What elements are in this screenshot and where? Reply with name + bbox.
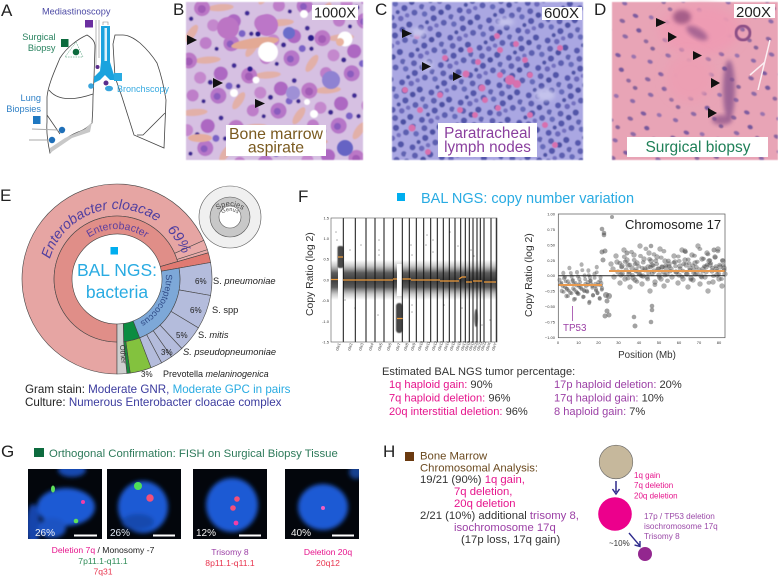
center marker — [110, 247, 118, 254]
lung shadow — [50, 122, 92, 153]
chromosome labels: chrY — [490, 342, 498, 351]
FISH caption: trisomy 8: 8p11.1-q11.1 — [205, 558, 255, 568]
gram stain line: Gram stain: Moderate GNR, Moderate GPC in pairs — [25, 383, 291, 396]
arrowheads — [402, 29, 462, 81]
main clone — [598, 497, 632, 531]
chromosome labels: chr12 — [430, 340, 439, 351]
chr1q gain block — [338, 246, 344, 300]
species labels: 3% — [141, 370, 153, 379]
panel A: lung diagram with biopsy sites — [6, 6, 170, 153]
chromosome labels: chr13 — [436, 340, 445, 351]
FISH caption: trisomy 8: Trisomy 8 — [211, 547, 249, 557]
arrowheads — [656, 18, 720, 118]
scattered points — [335, 231, 491, 326]
x axis title: Position (Mb) — [618, 350, 676, 361]
chromosome labels: chr11 — [423, 340, 432, 351]
species labels: S. spp — [212, 305, 238, 315]
site: lung biopsy lower — [49, 137, 55, 143]
y axis labels: 1.5 — [323, 216, 330, 220]
main clone changes: 7q deletion — [634, 481, 673, 490]
chromosome labels: chr17 — [459, 340, 468, 351]
label: bronchoscopy: Bronchscopy — [117, 84, 170, 94]
label: Enterobacter: Enterobacter — [86, 222, 149, 238]
x axis labels: 50 — [657, 340, 662, 345]
FISH caption: deletion 20q: 20q12 — [316, 558, 340, 568]
label: Streptococcus: Streptococcus — [140, 274, 172, 326]
chromosomal analysis text — [420, 450, 579, 546]
y axis labels: −0.75 — [545, 320, 556, 324]
y axis labels: 1.0 — [323, 236, 330, 241]
y axis labels: -1.0 — [322, 319, 330, 324]
FISH image 3: 12% — [196, 528, 216, 539]
chart: chromosome 17 copy ratio — [524, 212, 728, 361]
subclone frequency: ~10% — [609, 539, 630, 548]
heading: FISH: Orthogonal Confirmation: FISH on Surgical Biopsy Tissue — [49, 448, 338, 460]
chart: genome-wide copy ratio — [305, 216, 498, 351]
plot frame — [331, 218, 497, 342]
x axis labels: 20 — [596, 340, 601, 345]
label: 69 percent: 69% — [168, 226, 191, 252]
chromosome labels: chr8 — [402, 342, 410, 351]
chr20 deletion block — [474, 309, 478, 327]
y axis labels: 0.50 — [547, 242, 556, 248]
magnification box: 200X — [736, 4, 771, 21]
species labels: S. pseudopneumoniae — [183, 347, 276, 357]
chromosome labels: chr1 — [334, 342, 342, 351]
chromosome labels: chr5 — [376, 342, 384, 351]
legend rings: species and genus — [198, 186, 262, 248]
chromosome labels: chrX — [484, 342, 492, 351]
caption box: surgical biopsy — [627, 137, 768, 157]
panel label G: G — [1, 442, 14, 461]
marker: lung biopsies square — [33, 116, 40, 124]
needle lines — [29, 129, 58, 140]
chromosome separators — [343, 218, 496, 342]
clonal evolution diagram — [598, 445, 718, 561]
subclone changes: 17p / TP53 deletion — [644, 512, 715, 521]
panel D: surgical biopsy micrograph — [612, 2, 778, 160]
y axis labels: 1.00 — [547, 212, 556, 216]
chromosome labels: chr4 — [367, 342, 375, 351]
TP53 annotation — [563, 306, 587, 334]
tissue detail — [188, 10, 353, 156]
species labels: S. pneumoniae — [213, 276, 276, 286]
left column — [389, 379, 528, 418]
main clone changes: 20q deletion — [634, 492, 678, 500]
y axis labels: 0.00 — [547, 273, 556, 278]
culture line: Culture: Numerous Enterobacter cloacae complex — [25, 396, 282, 409]
x axis labels: 80 — [717, 340, 722, 345]
Prevotella outer — [126, 338, 151, 373]
heading marker: bone marrow — [405, 452, 414, 461]
chromosome labels: chr22 — [479, 340, 488, 351]
y axis labels — [322, 216, 330, 344]
right column: 8 haploid gain: 7% — [554, 406, 645, 418]
right column: 17q haploid gain: 10% — [554, 392, 664, 404]
chromosome labels: chr10 — [416, 340, 425, 351]
y axis labels: 0.75 — [547, 227, 556, 232]
FISH image 2: 26% — [110, 528, 130, 539]
TP53 annotation: TP53 — [563, 323, 587, 334]
chromosomal analysis text: 20q deletion — [454, 498, 516, 510]
chromosomal analysis text: 19/21 (90%) 1q gain, — [420, 474, 525, 486]
other slice — [117, 324, 127, 374]
chromosome labels: chr7 — [394, 342, 402, 351]
FISH caption: deletion 7q: 7p11.1-q11.1 — [78, 556, 128, 566]
magnification box: 1000X — [314, 6, 356, 22]
species labels: 5% — [176, 331, 188, 340]
arrow: founder to main clone — [612, 481, 620, 494]
segment means — [558, 271, 725, 285]
caption box: bone marrow aspirate: aspirate — [248, 140, 304, 156]
marker: surgical biopsy square — [61, 39, 68, 47]
label: surgical biopsy: Surgical — [22, 32, 56, 42]
site: lung biopsy upper — [59, 127, 65, 133]
tumor percentage table — [382, 366, 682, 418]
y axis labels: −0.50 — [545, 304, 556, 309]
inner ring: Streptococcus — [133, 268, 180, 338]
y axis labels — [545, 212, 556, 340]
subclone changes: isochromosome 17q — [644, 522, 718, 531]
species labels: Prevotella melaninogenica — [163, 369, 269, 379]
label: surgical biopsy: Biopsy — [28, 43, 56, 53]
FISH caption: deletion 7q: Deletion 7q / Monosomy -7 — [52, 545, 154, 555]
label: mediastinoscopy: Mediastinoscopy — [42, 6, 111, 16]
y axis labels: 0.5 — [323, 256, 330, 262]
panel label C: C — [375, 0, 387, 19]
marker: bronchoscopy square — [114, 73, 122, 81]
y axis labels: 0.25 — [547, 258, 556, 263]
site: bronchial right — [105, 86, 113, 91]
y axis labels: −1.00 — [545, 335, 556, 340]
chromosomal analysis text: (17p loss, 17q gain) — [461, 534, 560, 546]
outer ring: Streptococcus species — [140, 262, 212, 368]
chromosomal analysis text: Bone Marrow — [420, 450, 488, 462]
heading marker: surgical biopsy — [34, 448, 44, 457]
heading marker: BAL NGS — [397, 193, 405, 201]
pale areas — [410, 18, 555, 101]
main clone changes: 1q gain — [634, 471, 660, 480]
y axis labels: -1.5 — [322, 340, 330, 344]
FISH image 4: 40% — [291, 528, 311, 539]
genome-wide data band — [331, 260, 497, 300]
label: Enterobacter cloacae: Enterobacter cloacae — [42, 199, 160, 259]
chromosome labels: chr19 — [467, 340, 476, 351]
founder clone — [599, 445, 633, 479]
caption box: bone marrow aspirate — [226, 125, 326, 156]
legend rings: species and genus: Species — [216, 201, 244, 210]
right lung outline — [113, 35, 166, 148]
site: mediastinal node lower — [104, 80, 108, 86]
FISH image 1 — [28, 469, 102, 539]
FISH image 4 — [285, 469, 359, 539]
FISH caption: deletion 20q: Deletion 20q — [304, 547, 352, 557]
x axis labels — [557, 340, 722, 345]
x axis labels: 60 — [677, 340, 682, 345]
segment means — [331, 257, 496, 318]
panel label D: D — [594, 0, 606, 19]
x axis labels: 70 — [697, 340, 702, 345]
chromosomal analysis text: 7q deletion, — [454, 486, 512, 498]
chromosome labels: chr9 — [409, 342, 417, 351]
x axis labels: 0 — [557, 340, 560, 345]
panel E: sunburst chart of bacteria — [22, 184, 212, 374]
right column: 17p haploid deletion: 20% — [554, 379, 682, 391]
y axis labels: -0.5 — [322, 298, 330, 303]
caption box: paratracheal lymph nodes: Paratracheal — [444, 125, 531, 142]
chromosome labels: chr18 — [463, 340, 472, 351]
chromosome labels: chr15 — [448, 340, 457, 351]
plot frame — [558, 214, 725, 338]
left column: 20q interstitial deletion: 96% — [389, 406, 528, 418]
chromosomal analysis text: 2/21 (10%) additional trisomy 8, — [420, 510, 579, 522]
chromosomal analysis text: Chromosomal Analysis: — [420, 462, 538, 474]
center label: bacteria — [86, 282, 148, 302]
trachea and bronchi — [94, 20, 116, 83]
site: surgical biopsy — [73, 49, 79, 55]
label: lung biopsies: Lung — [21, 93, 41, 103]
heading: copy number variation: BAL NGS: copy number variation — [421, 191, 634, 207]
legend rings: species and genus: Genus — [221, 208, 239, 214]
y axis labels: −0.25 — [545, 288, 556, 294]
x axis labels: 40 — [637, 340, 642, 345]
x axis labels: 30 — [616, 340, 621, 345]
marker: mediastinoscopy square — [85, 20, 93, 28]
y axis title: Copy Ratio (log 2) — [305, 232, 316, 316]
red slice — [160, 253, 211, 271]
panel label E: E — [0, 186, 11, 205]
chromosome labels: chr6 — [385, 342, 393, 351]
chromosomal analysis text: isochromosome 17q — [454, 522, 556, 534]
species labels — [141, 276, 276, 379]
left column: 7q haploid deletion: 96% — [389, 392, 511, 404]
chromosome labels: chr14 — [442, 340, 451, 351]
species labels: 6% — [190, 306, 202, 315]
magnification box: 600X — [544, 5, 579, 22]
chromosome labels: chr20 — [471, 340, 480, 351]
biopsy wedge — [65, 42, 83, 57]
thin green divider — [124, 341, 130, 374]
subclone — [638, 547, 652, 561]
y axis labels: 0.0 — [323, 278, 330, 282]
caption box: bone marrow aspirate: Bone marrow — [229, 126, 323, 143]
FISH caption: deletion 7q: 7q31 — [93, 566, 113, 576]
caption box: paratracheal lymph nodes: lymph nodes — [444, 139, 531, 156]
pink cells — [402, 33, 563, 155]
center label: BAL NGS: — [77, 260, 157, 280]
chr7q loss block — [396, 264, 402, 333]
species labels: 3% — [161, 348, 173, 357]
caption box: surgical biopsy: Surgical biopsy — [645, 139, 751, 156]
arrowheads — [187, 35, 265, 108]
panel label B: B — [173, 0, 184, 19]
panel B: bone marrow micrograph — [186, 2, 363, 160]
pink matrix and infiltrate — [660, 5, 770, 125]
species labels: S. mitis — [198, 330, 229, 340]
chromosome labels: chr16 — [454, 340, 463, 351]
y axis title: Copy Ratio (log 2) — [524, 233, 535, 317]
subclone changes: Trisomy 8 — [644, 532, 680, 541]
inner ring: Enterobacter — [54, 216, 178, 342]
site: mediastinal node upper — [96, 65, 100, 69]
chromosome labels: chr21 — [475, 340, 484, 351]
data points — [557, 215, 728, 328]
zero line — [558, 275, 725, 277]
left lung outline — [47, 35, 95, 153]
Prevotella inner — [123, 321, 140, 342]
label: lung biopsies: Biopsies — [6, 104, 41, 114]
x axis labels: 10 — [576, 340, 581, 345]
right column — [554, 379, 682, 418]
chart title: chromosome 17: Chromosome 17 — [625, 217, 721, 232]
FISH image 2 — [107, 469, 181, 539]
panel label H: H — [383, 442, 395, 461]
table heading: Estimated BAL NGS tumor percentage: — [382, 366, 575, 378]
FISH image 1: 26% — [35, 528, 55, 539]
chromosome labels: chr3 — [357, 342, 365, 351]
panel label F: F — [298, 187, 308, 206]
FISH image 3 — [193, 469, 267, 539]
panel label A: A — [1, 1, 13, 20]
species labels: 6% — [195, 277, 207, 286]
left column: 1q haploid gain: 90% — [389, 379, 493, 391]
outer ring: small Enterobacter slices — [175, 240, 208, 262]
panel C: lymph node micrograph — [392, 2, 583, 160]
label: Other: Other — [118, 345, 128, 364]
chromosome labels — [334, 340, 498, 351]
outer ring: Enterobacter cloacae — [22, 184, 204, 374]
caption box: paratracheal lymph nodes — [438, 123, 537, 157]
chromosome labels: chr2 — [346, 342, 354, 351]
arrow: main clone to subclone — [629, 533, 640, 546]
site: bronchial left — [88, 83, 94, 89]
